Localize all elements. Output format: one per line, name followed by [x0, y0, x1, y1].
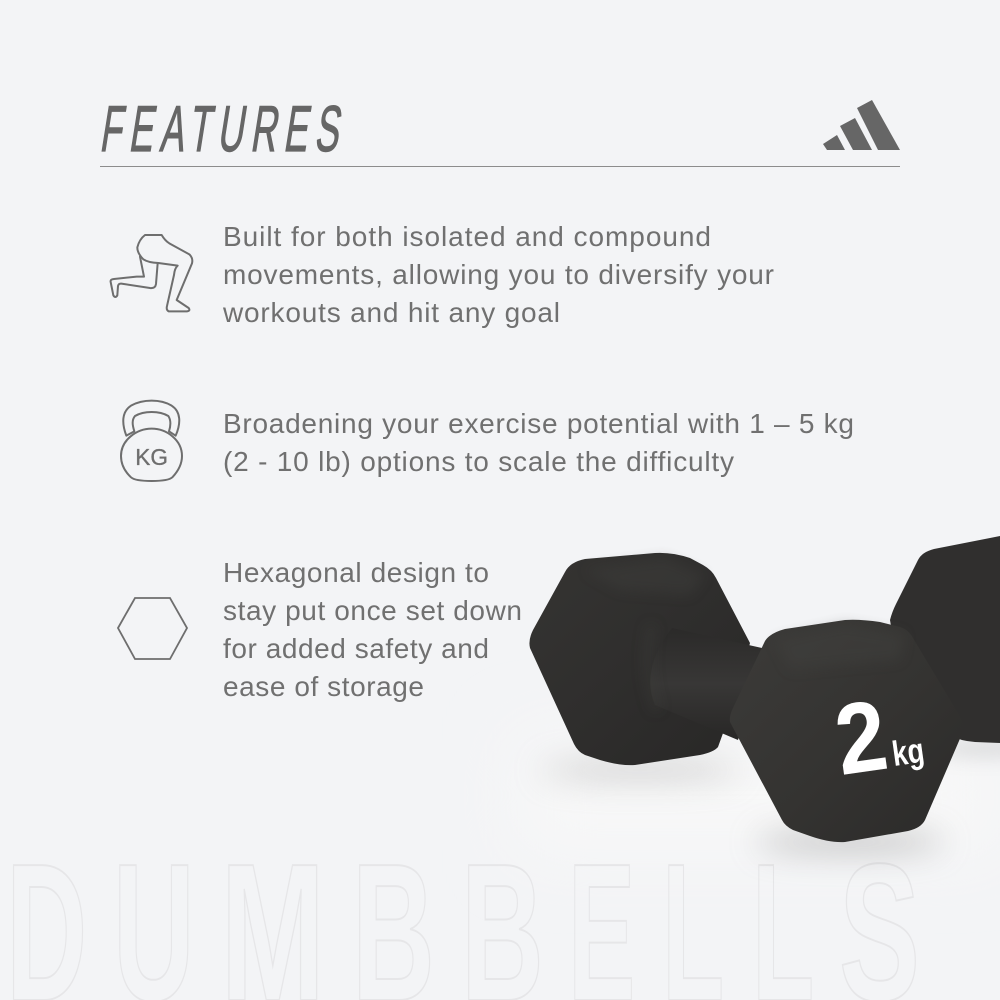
weight label 2kg	[829, 680, 927, 797]
floor shadows	[540, 741, 1000, 852]
watermark: DUMBBELLS outlined title	[6, 822, 920, 1000]
title: FEATURES: FEATURES	[97, 93, 347, 166]
front dumbbell head	[730, 620, 963, 842]
icon: kettlebell	[121, 401, 182, 481]
dumbbell photo illustration	[529, 536, 1000, 852]
icon: lunge legs	[111, 235, 192, 311]
text: feature 1: Built for both isolated and compound	[223, 221, 711, 252]
floor glow	[520, 740, 1000, 850]
text: feature 2: (2 - 10 lb) options to scale the difficulty	[223, 446, 734, 477]
text: feature 3: ease of storage	[223, 671, 424, 702]
left dumbbell head	[529, 553, 750, 765]
icon: adidas logo	[823, 100, 900, 150]
icon: kettlebell: KG	[135, 444, 168, 470]
weight label 2kg: kg	[890, 731, 927, 774]
text: feature 3: stay put once set down	[223, 595, 522, 626]
left head top facet highlight	[585, 558, 705, 595]
text: feature 3: for added safety and	[223, 633, 489, 664]
text: feature 3	[223, 557, 522, 702]
text: feature 1	[222, 221, 774, 328]
handle	[650, 628, 762, 740]
text: feature 1: movements, allowing you to diversify your	[223, 259, 774, 290]
text: feature 1: workouts and hit any goal	[222, 297, 560, 328]
front head top facet highlight	[775, 624, 905, 670]
text: feature 2: Broadening your exercise potential with 1 – 5 kg	[223, 408, 854, 439]
icon: hexagon	[118, 598, 187, 659]
text: feature 2	[223, 408, 854, 477]
text: feature 3: Hexagonal design to	[223, 557, 489, 588]
header rule	[100, 166, 900, 167]
handle socket highlight	[648, 625, 657, 710]
weight label 2kg: 2	[829, 680, 894, 797]
back dumbbell head	[890, 536, 1000, 743]
